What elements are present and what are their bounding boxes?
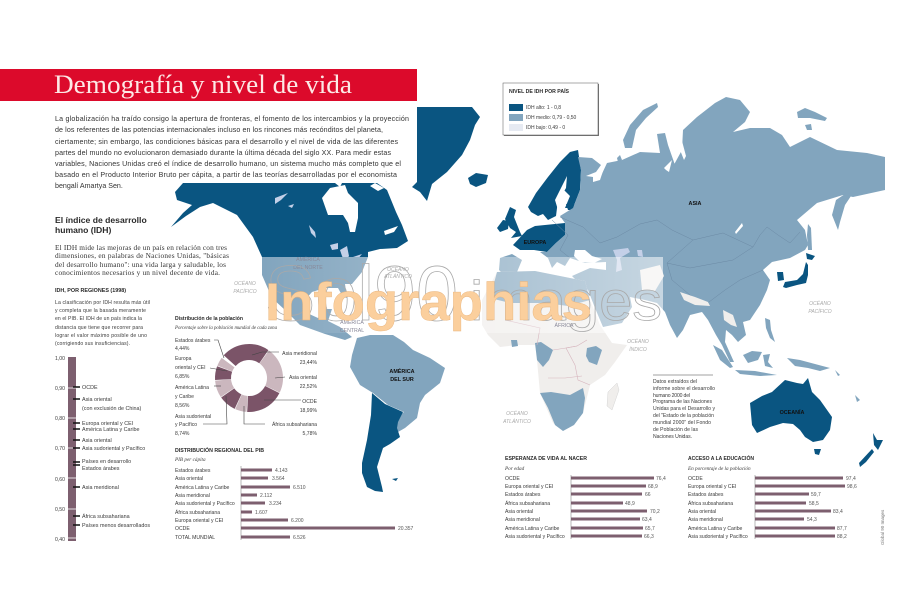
- scale region labels: Asia sudoriental y Pacífico: [82, 446, 145, 452]
- life expectancy bar chart: [504, 456, 666, 540]
- life expectancy row labels: Asia sudoriental y Pacífico: [505, 534, 565, 540]
- donut chart: [212, 341, 286, 415]
- IDH by regions description: en el PIB. El IDH de un país indica la: [55, 316, 142, 322]
- scale region labels: OCDE: [82, 385, 98, 391]
- map: Iberia and Southern Europe: [499, 254, 522, 276]
- life expectancy row labels: Estados árabes: [505, 492, 541, 498]
- watermark: Infographias: Infographias: [265, 273, 592, 332]
- education row labels: OCDE: [688, 476, 703, 482]
- life expectancy values: 66,3: [644, 534, 654, 540]
- scale bar: [68, 357, 76, 541]
- scale axis labels: [55, 356, 65, 543]
- intro paragraph: variables, Naciones Unidas creó el índice de desarrollo humano, un sistema mucho más completo que el: [55, 160, 401, 168]
- map: Arctic islands: [617, 108, 827, 162]
- life expectancy row labels: África subsahariana: [505, 500, 550, 507]
- education subtitle: En porcentaje de la población: [687, 466, 751, 472]
- life expectancy row labels: América Latina y Caribe: [505, 526, 560, 532]
- GDP row labels: OCDE: [175, 526, 190, 532]
- donut labels left: Europa: [175, 356, 192, 362]
- donut labels left: 8,56%: [175, 403, 190, 409]
- map: Gabon and Congo medium IDH: [535, 342, 553, 367]
- map: New Zealand: [859, 433, 883, 467]
- scale axis labels: 1,00: [55, 356, 65, 362]
- GDP values: [255, 468, 414, 541]
- map: Greenland: [412, 107, 480, 201]
- watermark: Sol90 images outline: Sol90: [265, 249, 458, 337]
- map: Falkland Islands: [392, 478, 398, 481]
- scale region labels: Asia meridional: [82, 485, 119, 491]
- donut leader lines: [203, 340, 301, 424]
- scale axis labels: 0,60: [55, 477, 65, 483]
- scale region labels: (con exclusión de China): [82, 406, 142, 412]
- scale axis labels: 0,40: [55, 537, 65, 543]
- IDH scale chart: [55, 356, 150, 543]
- education row labels: Europa oriental y CEI: [688, 484, 736, 490]
- map: Ghana medium IDH: [511, 340, 518, 347]
- legend: medium: IDH medio: 0,79 - 0,50: [526, 115, 577, 121]
- donut labels right: 22,52%: [300, 384, 317, 390]
- scale region labels: América Latina y Caribe: [82, 427, 140, 433]
- education values: 59,7: [811, 492, 821, 498]
- IDH explanation paragraph: conocimientos necesarios y un nivel decente de vida.: [55, 268, 220, 277]
- map: Philippines, Indonesia and New Guinea: [713, 318, 860, 402]
- GDP heading: DISTRIBUCIÓN REGIONAL DEL PIB: [175, 446, 264, 454]
- life expectancy bars: [571, 476, 654, 538]
- life expectancy subtitle: Por edad: [504, 466, 525, 472]
- GDP values: 6.526: [293, 535, 306, 541]
- donut labels right: Asia meridional: [282, 351, 317, 357]
- map: South America medium IDH: [350, 335, 445, 432]
- life expectancy row labels: Europa oriental y CEI: [505, 484, 553, 490]
- map label: Océano Índico: OCÉANO: [627, 338, 649, 345]
- IDH by regions description: distancia que tiene que recorrer para: [55, 325, 143, 331]
- life expectancy heading: ESPERANZA DE VIDA AL NACER: [505, 456, 587, 462]
- map: Southern Africa medium IDH: [540, 388, 585, 431]
- intro paragraph: [55, 115, 409, 190]
- GDP row labels: Europa oriental y CEI: [175, 518, 223, 524]
- IDH explanation paragraph: El IDH mide las mejoras de un país en relación con tres: [55, 243, 227, 252]
- population subtitle: Porcentaje sobre la población mundial de cada zona: [174, 325, 277, 331]
- IDH by regions description: lograr el valor máximo posible de uno: [55, 333, 147, 339]
- IDH explanation paragraph: dimensiones, en palabras de Naciones Unidas, "básicas: [55, 251, 229, 260]
- scale region labels: [82, 385, 150, 529]
- credit line: Global 90 Images: [880, 509, 885, 545]
- map label: Oceanía: OCEANÍA: [780, 408, 805, 416]
- GDP subtitle: PIB per cápita: [174, 457, 206, 463]
- life expectancy row labels: OCDE: [505, 476, 520, 482]
- education values: 88,2: [837, 534, 847, 540]
- map: Japan and South Korea: [777, 253, 815, 288]
- heading: El índice de desarrollo humano: humano (IDH): [55, 225, 111, 235]
- map: North America high IDH: [171, 183, 408, 257]
- donut labels right: 5,78%: [303, 431, 317, 437]
- map label: Océano Pacífico west: PACÍFICO: [233, 288, 257, 295]
- map: Iceland: [468, 173, 488, 187]
- map: USA, Mexico and Central America medium IDH: [262, 257, 368, 340]
- scale region labels: Países menos desarrollados: [82, 523, 150, 529]
- map: Madagascar: [607, 383, 619, 410]
- education values: 87,7: [837, 526, 847, 532]
- life expectancy values: [625, 476, 666, 540]
- map: Asian internal borders: [552, 217, 800, 305]
- map: Nepal, Laos and Afghanistan low IDH: [640, 265, 737, 327]
- source note: [653, 375, 715, 440]
- education values: 98,6: [847, 484, 857, 490]
- map label: América Central: CENTRAL: [340, 328, 364, 334]
- life expectancy values: 76,4: [656, 476, 666, 482]
- map label: Océano Atlántico north: ATLÁNTICO: [383, 273, 412, 280]
- donut labels right: [272, 351, 318, 437]
- map: Africa low IDH: [482, 271, 627, 430]
- education values: [807, 476, 857, 540]
- legend: low: IDH bajo: 0,49 - 0: [526, 125, 565, 131]
- IDH by regions description: (corrigiendo sus insuficiencias).: [55, 341, 130, 347]
- source note: informe sobre el desarrollo: [653, 386, 715, 392]
- life expectancy values: 48,9: [625, 501, 635, 507]
- GDP values: 6.200: [291, 518, 304, 524]
- scale region labels: Asia oriental: [82, 438, 112, 444]
- map: African borders: [505, 320, 590, 385]
- map label: América del Norte: DEL NORTE: [293, 265, 323, 271]
- donut labels right: África subsahariana: [272, 421, 317, 428]
- donut labels right: 18,99%: [300, 408, 317, 414]
- map: North Africa medium IDH: [490, 271, 590, 306]
- scale region labels: África subsahariana: [82, 513, 130, 520]
- population heading: Distribución de la población: [175, 316, 243, 322]
- scale axis labels: 0,70: [55, 446, 65, 452]
- map: Tasmania: [814, 449, 821, 455]
- map: Kenya medium IDH: [586, 346, 602, 365]
- scale region labels: Asia oriental: [82, 397, 112, 403]
- map: Canadian lakes: [275, 193, 362, 262]
- map label: Europa: EUROPA: [524, 240, 546, 246]
- life expectancy row labels: [505, 476, 565, 540]
- GDP bar chart: [174, 446, 414, 541]
- GDP row labels: [175, 468, 235, 541]
- legend title: NIVEL DE IDH POR PAÍS: [509, 87, 570, 95]
- source note: Naciones Unidas.: [653, 434, 692, 440]
- education access bar chart: [687, 454, 857, 540]
- education values: 54,3: [807, 517, 817, 523]
- source note: Programa de las Naciones: [653, 399, 712, 405]
- education values: 83,4: [833, 509, 843, 515]
- donut labels left: y Pacífico: [175, 422, 197, 428]
- population distribution panel: [174, 316, 318, 437]
- scale axis labels: 0,50: [55, 507, 65, 513]
- life expectancy values: 65,7: [645, 526, 655, 532]
- education heading: ACCESO A LA EDUCACIÓN: [688, 454, 754, 462]
- world map: [171, 97, 885, 492]
- scale axis labels: 0,80: [55, 416, 65, 422]
- map label: Océano Atlántico north: OCÉANO: [387, 266, 409, 273]
- donut labels left: Estados árabes: [175, 338, 211, 344]
- map label: América del Sur: AMÉRICA: [389, 367, 415, 375]
- map label: Asia: ASIA: [689, 201, 702, 207]
- GDP values: 3.234: [269, 501, 282, 507]
- map: Western Europe high IDH: [497, 150, 581, 252]
- GDP row labels: Estados árabes: [175, 468, 211, 474]
- education row labels: África subsahariana: [688, 500, 733, 507]
- intro paragraph: ciertamente; sin embargo, las condiciones básicas para el desarrollo y el nivel de vida de las diferentes: [55, 138, 398, 146]
- GDP values: 3.564: [272, 476, 285, 482]
- GDP row labels: Asia sudoriental y Pacífico: [175, 501, 235, 507]
- IDH explanation paragraph: [55, 243, 229, 277]
- intro paragraph: de los referentes de las potencias internacionales incluso en los rincones más recónditos del planeta,: [55, 126, 383, 134]
- map label: Océano Índico: ÍNDICO: [629, 346, 647, 353]
- life expectancy values: 63,4: [642, 517, 652, 523]
- donut labels left: 8,74%: [175, 431, 190, 437]
- legend: IDH levels by country: [503, 83, 599, 136]
- life expectancy values: 70,2: [650, 509, 660, 515]
- education row labels: Asia sudoriental y Pacífico: [688, 534, 748, 540]
- GDP row labels: África subsahariana: [175, 509, 220, 516]
- map label: Océano Pacífico west: OCÉANO: [234, 280, 256, 287]
- map: Nova Zembla: [623, 103, 658, 148]
- donut labels left: 6,85%: [175, 374, 190, 380]
- IDH by regions description: La clasificación por IDH resulta más útil: [55, 300, 150, 306]
- donut labels left: [175, 338, 211, 437]
- scale axis labels: 0,90: [55, 386, 65, 392]
- GDP values: 4.143: [275, 468, 288, 474]
- watermark: Sol90 images outline: [265, 249, 662, 337]
- GDP bars: [241, 468, 395, 538]
- intro paragraph: partes del mundo no evolucionaron demasiado durante la última década del siglo XX. Para medir estas: [55, 149, 391, 157]
- education row labels: Asia oriental: [688, 509, 716, 515]
- source note: mundial 2000" del Fondo: [653, 420, 711, 426]
- map: Kamchatka and Sea of Okhotsk coast: [832, 193, 853, 230]
- watermark: Sol90 images outline: images: [470, 269, 662, 332]
- GDP row labels: América Latina y Caribe: [175, 485, 230, 491]
- title banner: [0, 69, 417, 101]
- map label: América del Norte: AMÉRICA: [296, 256, 320, 263]
- heading: El índice de desarrollo humano: El índice de desarrollo: [55, 215, 147, 225]
- donut labels right: Asia oriental: [289, 375, 317, 381]
- map: Eurasia medium IDH: [540, 97, 885, 362]
- map: Australia: [750, 378, 832, 442]
- donut labels left: América Latina: [175, 385, 209, 391]
- GDP values: 1.607: [255, 510, 268, 516]
- IDH explanation paragraph: del desarrollo humano": una vida larga y saludable, los: [55, 260, 226, 269]
- life expectancy values: 68,9: [648, 484, 658, 490]
- education row labels: Estados árabes: [688, 492, 724, 498]
- GDP values: 20.357: [398, 526, 414, 532]
- GDP values: 6.510: [293, 485, 306, 491]
- education bars: [755, 476, 845, 538]
- GDP row labels: Asia meridional: [175, 493, 210, 499]
- legend: high: IDH alto: 1 - 0,8: [526, 105, 561, 111]
- source note: Unidas para el Desarrollo y: [653, 406, 715, 412]
- scale region labels: Europa oriental y CEI: [82, 421, 133, 427]
- donut labels left: oriental y CEI: [175, 365, 206, 371]
- scale region markers: [73, 387, 80, 525]
- map label: América Central: AMÉRICA: [340, 319, 364, 326]
- map: Sakhalin: [807, 224, 812, 250]
- map: Hudson Bay and arctic gaps: [322, 183, 398, 235]
- donut labels left: y Caribe: [175, 394, 194, 400]
- map: inland seas: [555, 141, 743, 272]
- GDP row labels: TOTAL MUNDIAL: [175, 535, 215, 541]
- source note: Datos extraídos del: [653, 379, 697, 385]
- IDH by regions description: [55, 300, 150, 347]
- education row labels: [688, 476, 748, 540]
- intro paragraph: basado en el Producto Interior Bruto per cápita, a partir de las teorías desarrolladas por el economista: [55, 171, 397, 179]
- IDH by regions description: y completa que la basada meramente: [55, 308, 146, 314]
- map label: África: ÁFRICA: [554, 322, 574, 329]
- title text: Demografía y nivel de vida: [54, 70, 352, 99]
- scale region labels: Países en desarrollo: [82, 459, 131, 465]
- map label: Océano Atlántico south: ATLÁNTICO: [502, 418, 531, 425]
- source note: de Población de las: [653, 427, 698, 433]
- donut labels right: OCDE: [302, 399, 318, 405]
- donut labels right: 23,44%: [300, 360, 317, 366]
- donut labels left: 4,44%: [175, 346, 190, 352]
- life expectancy row labels: Asia oriental: [505, 509, 533, 515]
- education values: 58,5: [809, 501, 819, 507]
- intro paragraph: bengalí Amartya Sen.: [55, 182, 123, 190]
- source note: humano 2000 del: [653, 393, 690, 399]
- intro paragraph: La globalización ha traído consigo la apertura de fronteras, el fomento de los intercambios y la proyección: [55, 115, 409, 123]
- source note: del "Estado de la población: [653, 413, 714, 419]
- education row labels: Asia meridional: [688, 517, 723, 523]
- map: Argentina and Chile high IDH: [362, 393, 403, 492]
- donut labels left: Asia sudoriental: [175, 414, 211, 420]
- education row labels: América Latina y Caribe: [688, 526, 743, 532]
- heading: IDH por regiones: IDH, POR REGIONES (1998): [55, 288, 126, 294]
- life expectancy values: 66: [645, 492, 651, 498]
- scale region labels: Estados árabes: [82, 466, 120, 472]
- GDP values: 2.112: [260, 493, 272, 499]
- education values: 97,4: [846, 476, 856, 482]
- map label: América del Sur: DEL SUR: [390, 377, 414, 383]
- map label: Océano Atlántico south: OCÉANO: [506, 410, 528, 417]
- map label: Océano Pacífico east: OCÉANO: [809, 300, 831, 307]
- life expectancy row labels: Asia meridional: [505, 517, 540, 523]
- map label: Océano Pacífico east: PACÍFICO: [808, 308, 832, 315]
- GDP row labels: Asia oriental: [175, 476, 203, 482]
